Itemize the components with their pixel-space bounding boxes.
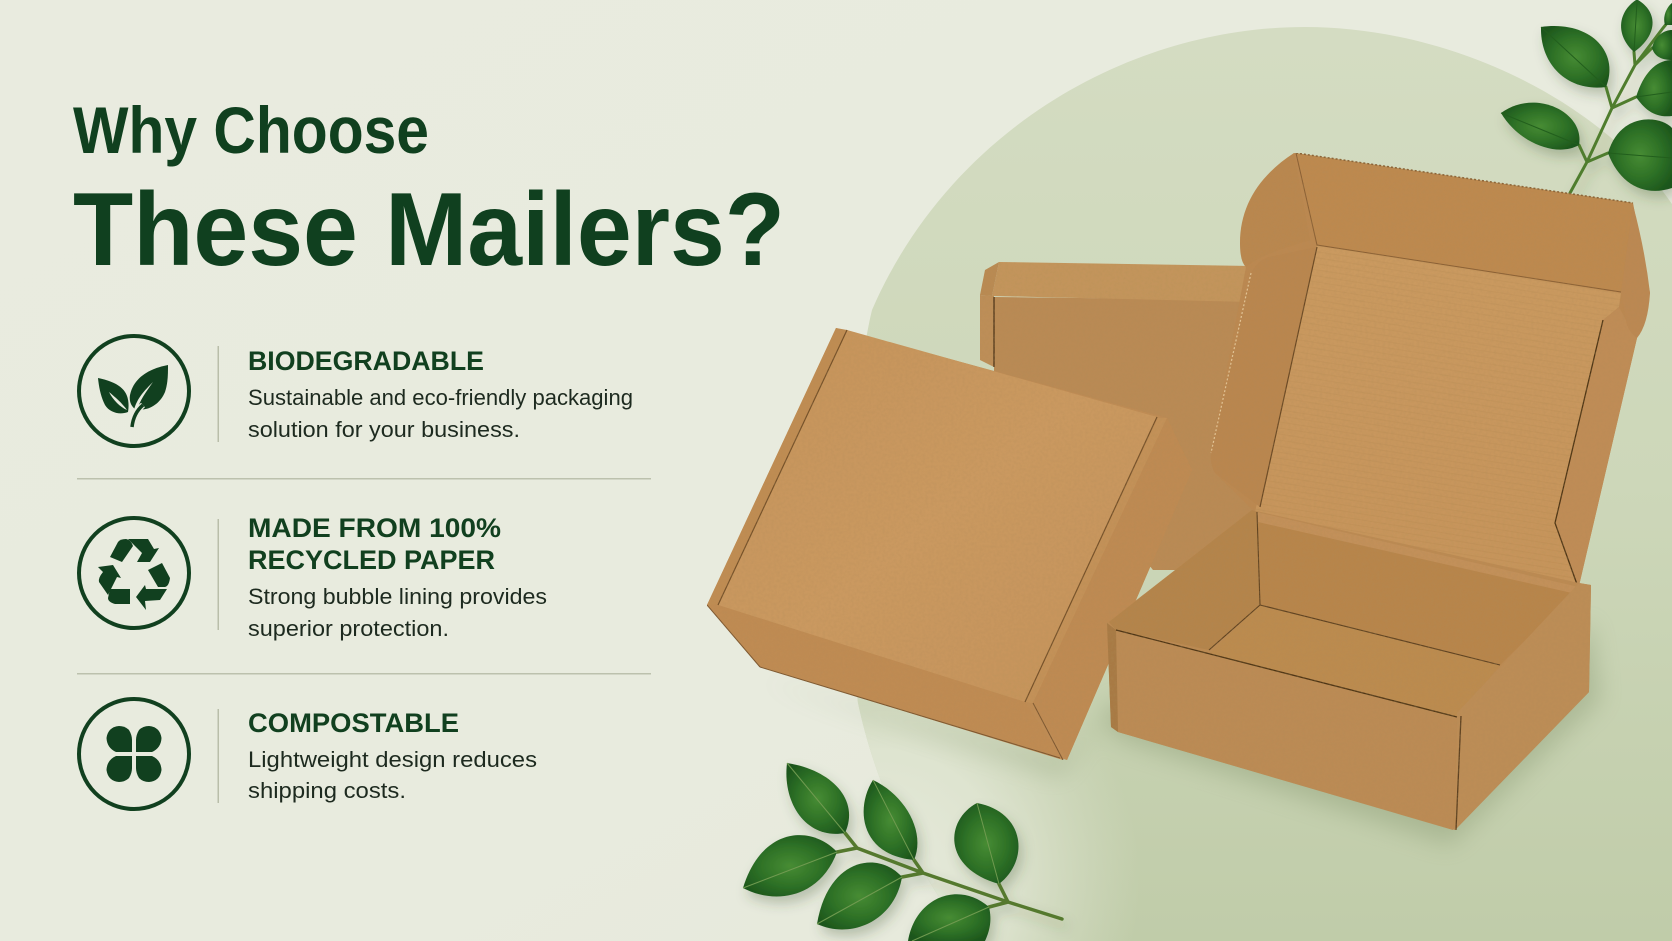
right side	[1033, 418, 1192, 760]
left side flap	[1211, 247, 1317, 507]
description: shipping costs.	[248, 778, 406, 803]
leaf sprig: bottom	[743, 763, 1062, 941]
front wall	[1116, 630, 1457, 830]
heading: RECYCLED PAPER	[248, 545, 495, 575]
description: Sustainable and eco-friendly packaging	[248, 385, 633, 410]
icon: recycle arrows in circle	[79, 518, 189, 628]
background arc shape	[840, 20, 1672, 941]
title line 1: Why Choose	[73, 93, 429, 167]
divider	[218, 709, 219, 803]
leaf sprig: top right	[1501, 0, 1672, 193]
description: Strong bubble lining provides	[248, 584, 547, 609]
icon: leaves in circle	[79, 336, 189, 446]
right ear flap	[1621, 205, 1650, 338]
description	[248, 584, 547, 641]
feature: recycled paper	[79, 513, 547, 641]
right outer wall	[1455, 583, 1591, 830]
description: solution for your business.	[248, 417, 520, 442]
lid inner panel	[1255, 245, 1621, 587]
title	[73, 93, 785, 288]
right strip	[1025, 418, 1167, 703]
description: Lightweight design reduces	[248, 747, 537, 772]
box shadows	[760, 620, 1600, 845]
heading	[248, 513, 501, 575]
left corner strip	[1107, 623, 1118, 732]
heading: COMPOSTABLE	[248, 708, 459, 738]
box: front closed mailer	[707, 328, 1192, 760]
heading: BIODEGRADABLE	[248, 346, 484, 376]
left ear flap	[1240, 153, 1310, 267]
left flap	[707, 328, 847, 605]
box: back closed mailer	[980, 262, 1262, 570]
right side flap	[1555, 307, 1637, 590]
divider	[218, 519, 219, 630]
description: superior protection.	[248, 616, 449, 641]
description	[248, 385, 633, 442]
description	[248, 747, 537, 803]
left inner wall	[1109, 510, 1260, 650]
divider	[218, 346, 219, 442]
top face	[718, 330, 1157, 702]
heading: MADE FROM 100%	[248, 513, 501, 543]
box floor	[1209, 605, 1500, 718]
icon: clover in circle	[79, 699, 189, 809]
box: open mailer	[1107, 153, 1650, 830]
back wall lip	[1257, 512, 1579, 593]
back inner wall	[1257, 512, 1579, 665]
feature: biodegradable	[79, 336, 633, 446]
front face	[707, 605, 1063, 760]
title line 2: These Mailers?	[73, 172, 785, 288]
feature: compostable	[79, 699, 537, 809]
back tuck flap	[1296, 153, 1633, 292]
